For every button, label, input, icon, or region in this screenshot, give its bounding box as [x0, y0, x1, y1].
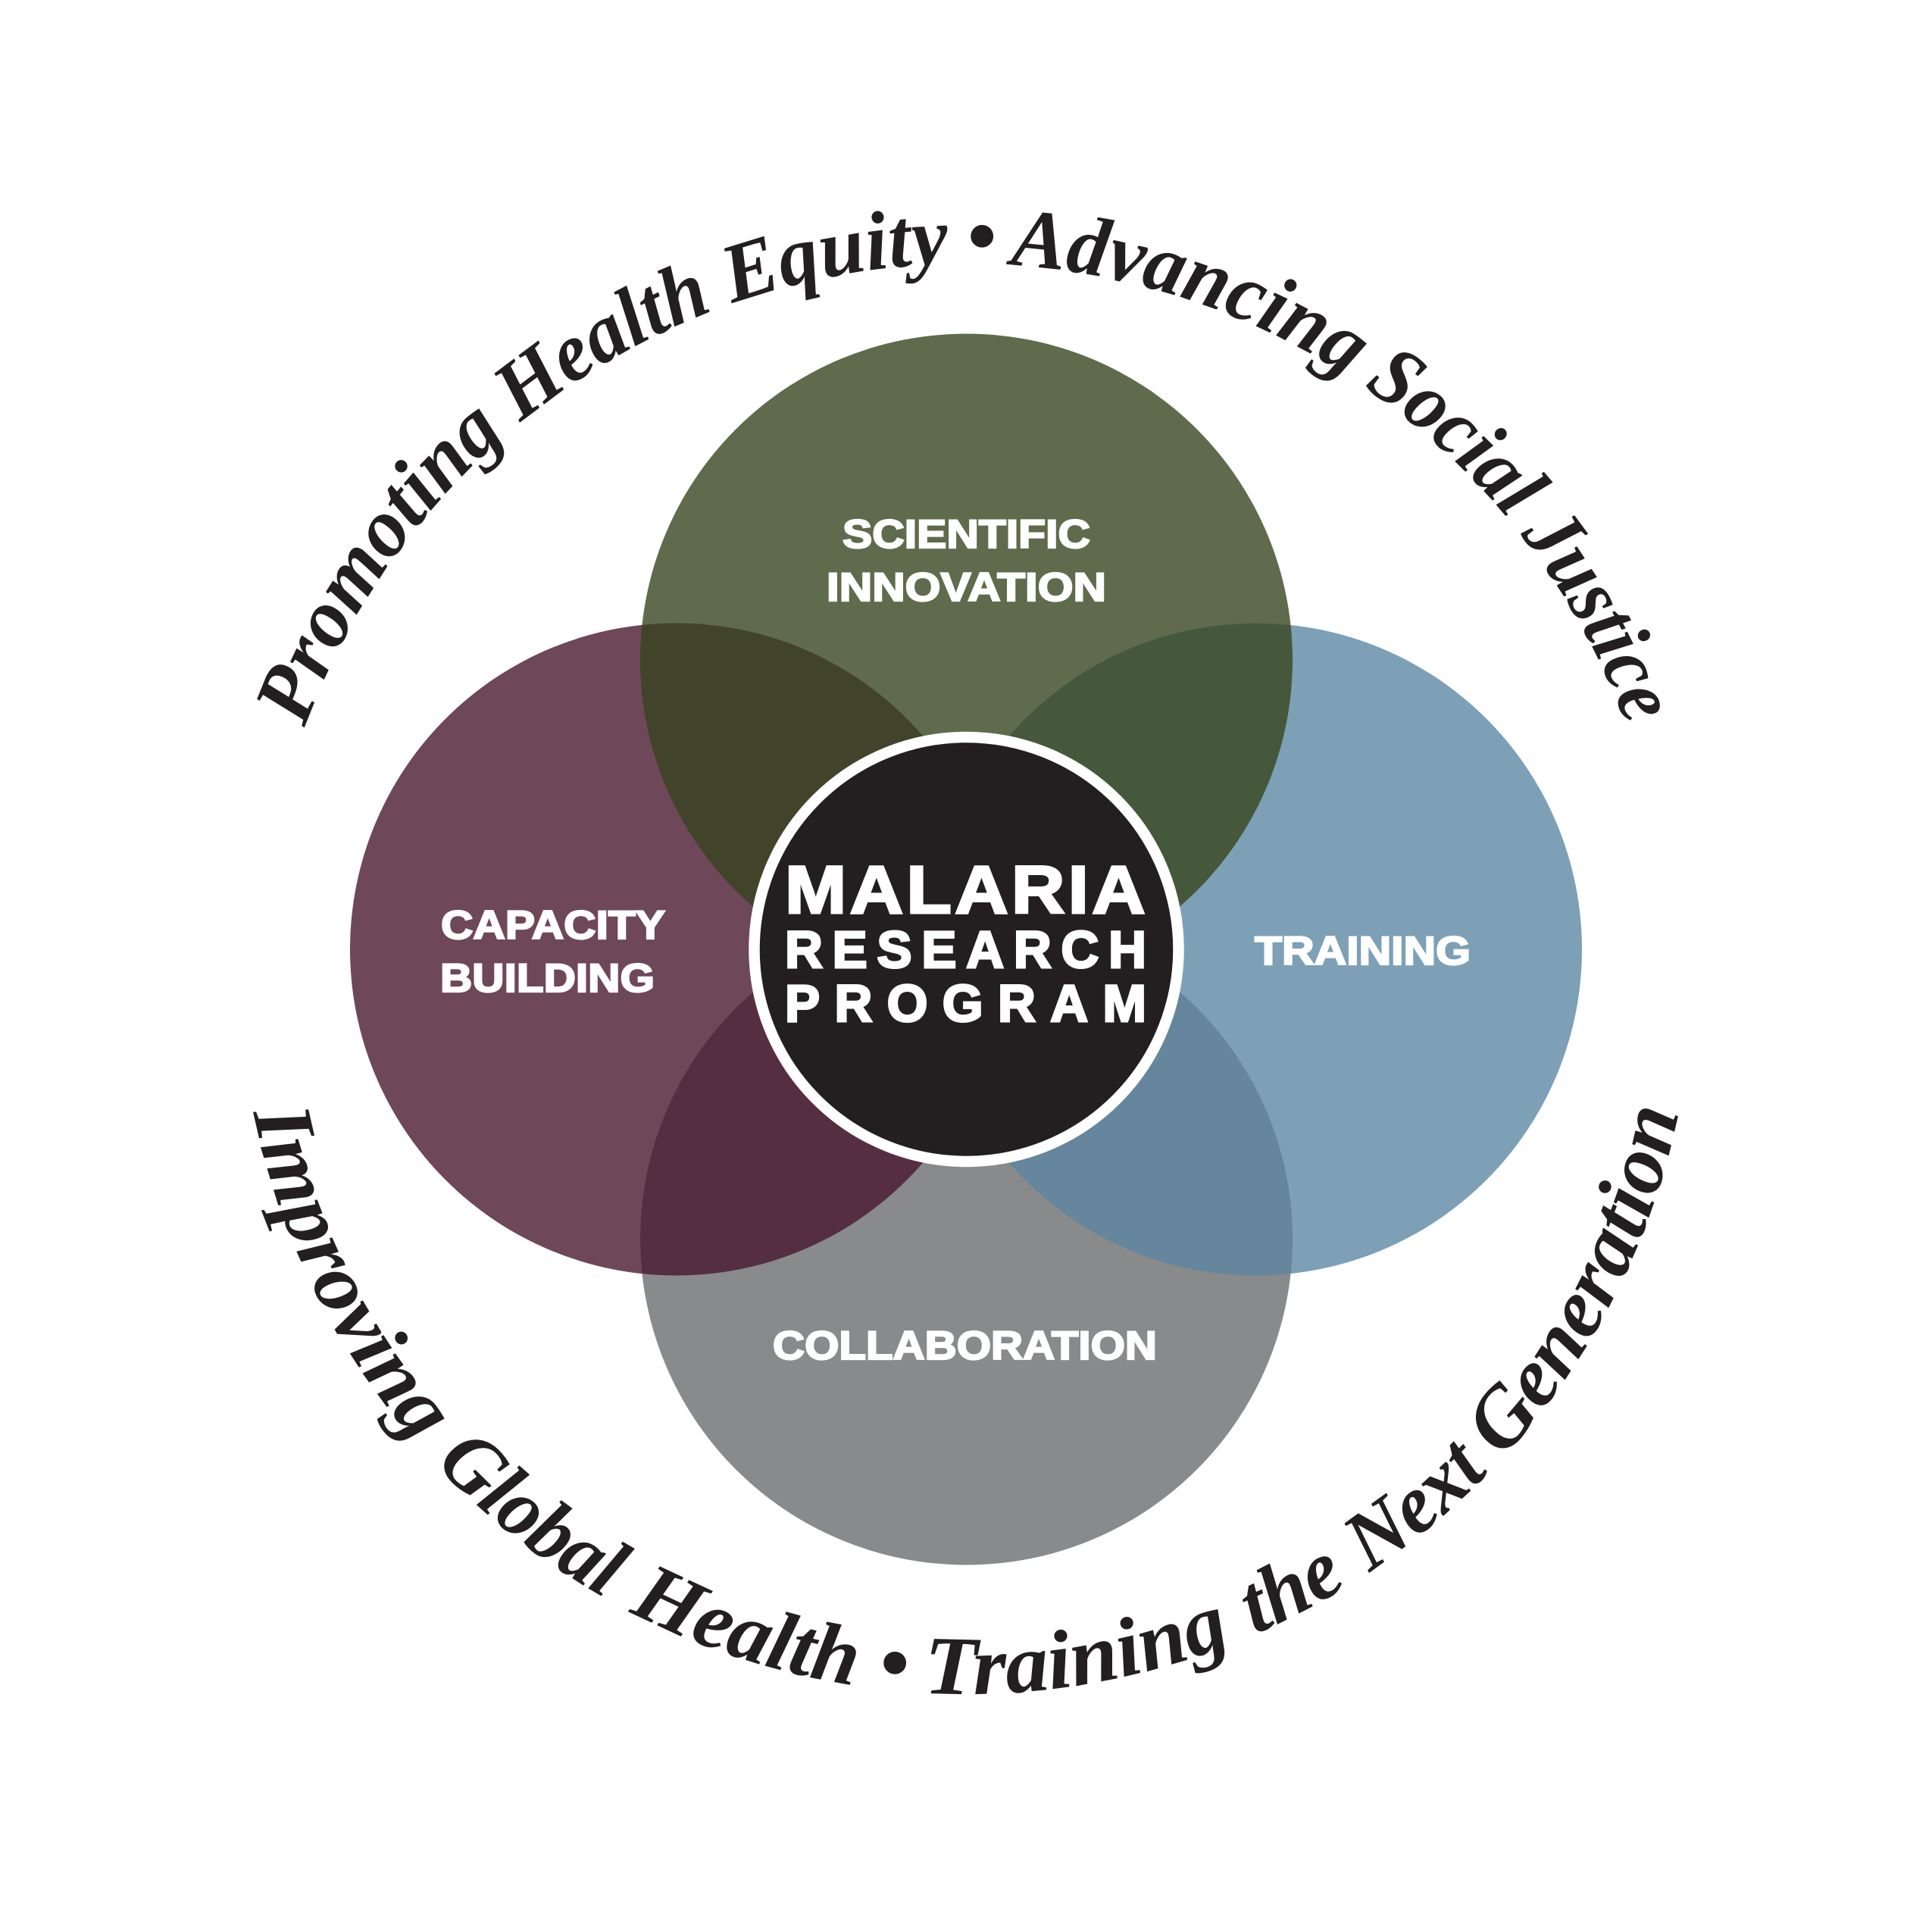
circle: scientific innovation — [640, 333, 1293, 986]
bottom arc text: Improving Global Health • Training the Next Generation — [253, 1108, 1678, 1694]
label: training: TRAINING — [1255, 929, 1471, 974]
center title: RESEARCH — [785, 921, 1146, 979]
label: capacity building: BUILDING — [440, 956, 655, 1001]
overlap: training and collaboration — [1009, 993, 1293, 1276]
overlap: capacity and collaboration — [640, 993, 923, 1276]
circle: training — [930, 623, 1582, 1276]
overlap: innovation and training — [1009, 623, 1293, 906]
center title — [785, 852, 1149, 1033]
label: collaboration: COLLABORATION — [773, 1324, 1157, 1368]
top arc text: Promoting Health Equity • Advancing Social Justice — [257, 211, 1660, 727]
label: capacity building: CAPACITY — [441, 903, 665, 948]
circle: collaboration — [640, 912, 1293, 1565]
label: scientific innovation — [827, 512, 1106, 610]
label: capacity building — [440, 903, 665, 1001]
overlap: innovation and capacity — [640, 623, 923, 906]
center circle — [755, 737, 1179, 1161]
venn diagram infographic — [253, 211, 1678, 1694]
label: scientific innovation: INNOVATION — [827, 565, 1106, 610]
label: scientific innovation: SCIENTIFIC — [843, 512, 1090, 557]
circle: capacity building — [350, 623, 1002, 1276]
center title: PROGRAM — [785, 974, 1146, 1033]
center title: MALARIA — [785, 852, 1149, 927]
